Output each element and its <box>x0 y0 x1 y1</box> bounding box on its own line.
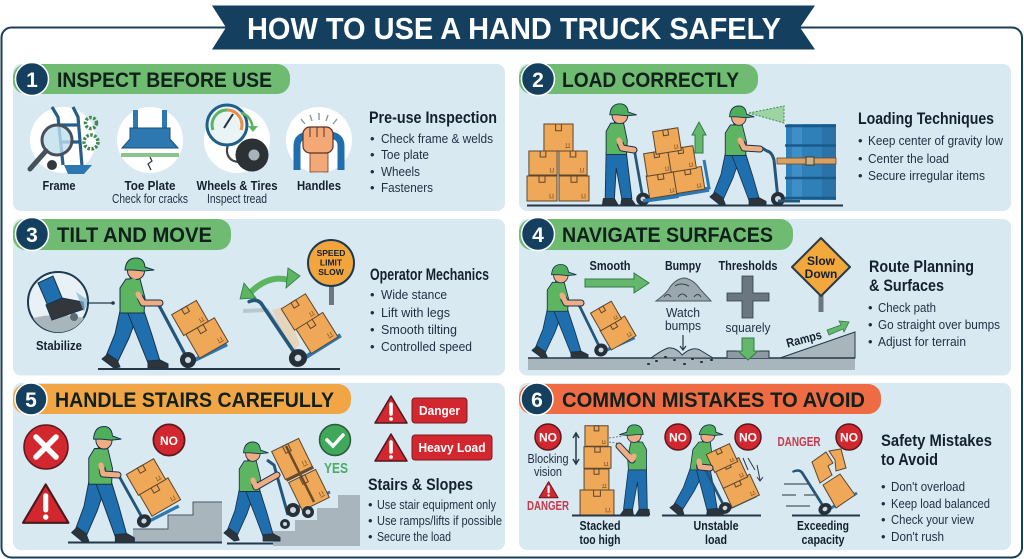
text: pre-use inspection: Toe plate <box>381 147 429 162</box>
text: loading techniques: Secure irregular items <box>868 168 985 183</box>
text: route planning: • <box>868 317 873 332</box>
labels: inspection items: Toe Plate <box>124 179 176 193</box>
warning: heavy load: Heavy Load <box>418 440 486 455</box>
panel: 4 navigate surfaces <box>519 218 1011 376</box>
labels: mistakes <box>580 519 849 547</box>
heading: tilt and move: TILT AND MOVE <box>57 223 212 247</box>
barrel <box>777 124 836 200</box>
ground line <box>572 514 649 516</box>
thresholds label and cross: squarely <box>726 321 771 335</box>
text: pre-use inspection: • <box>370 147 375 162</box>
text: route planning: & Surfaces <box>869 277 944 295</box>
text: operator mechanics: Operator Mechanics <box>370 266 489 284</box>
blocking vision note: Blocking <box>528 452 569 466</box>
sign: slow down: Slow <box>807 254 836 268</box>
text: stairs and slopes: • <box>368 529 373 544</box>
stairs right <box>227 495 360 546</box>
title banner: HOW TO USE A HAND TRUCK SAFELY <box>247 11 781 46</box>
text: operator mechanics: • <box>370 339 375 354</box>
text: safety mistakes: • <box>881 512 886 527</box>
heading: handle stairs carefully <box>13 383 351 415</box>
heading: navigate surfaces: NAVIGATE SURFACES <box>562 223 773 247</box>
heading: tilt and move <box>13 218 231 250</box>
warning: danger: Danger <box>419 403 460 418</box>
sign: speed limit slow <box>308 240 354 305</box>
text: operator mechanics: Smooth tilting <box>381 322 457 337</box>
worker with truck <box>532 264 636 359</box>
arrow: lift up <box>692 122 706 153</box>
text: stairs and slopes <box>368 476 502 544</box>
text: stairs and slopes: Stairs & Slopes <box>368 476 473 494</box>
heading: tilt and move: 3 <box>26 224 38 247</box>
text: loading techniques: • <box>858 168 863 183</box>
heading: load correctly: LOAD CORRECTLY <box>562 68 739 92</box>
worker pushing truck <box>102 258 229 372</box>
bumpy label and gravel: bumps <box>665 319 701 333</box>
labels: mistakes: too high <box>580 533 620 547</box>
badge: no: NO <box>160 434 178 448</box>
text: pre-use inspection: • <box>370 131 375 146</box>
heading: navigate surfaces: 4 <box>532 224 544 247</box>
badges: no no: NO <box>739 430 757 444</box>
text: route planning: • <box>868 300 873 315</box>
stairs left <box>68 502 222 542</box>
panel: 2 load correctly <box>519 62 1011 211</box>
bumpy label and gravel: Bumpy <box>665 259 701 273</box>
blocking vision note: DANGER <box>527 499 569 513</box>
bumps on ground <box>648 348 713 364</box>
labels: inspection items: Inspect tread <box>207 192 267 206</box>
badge: yes <box>320 424 350 477</box>
arrow: height <box>573 433 579 464</box>
ground strip <box>528 332 855 370</box>
bumpy label and gravel <box>656 259 711 350</box>
stacked boxes <box>580 426 614 515</box>
sign: speed limit slow: LIMIT <box>320 258 343 268</box>
labels: mistakes: capacity <box>802 533 845 547</box>
labels: mistakes: Exceeding <box>797 519 849 533</box>
ramps label and arrow <box>785 321 849 351</box>
text: pre-use inspection: Pre-use Inspection <box>369 109 497 127</box>
danger label and no badge: NO <box>840 430 858 444</box>
text: operator mechanics: • <box>370 305 375 320</box>
text: operator mechanics: Lift with legs <box>381 305 450 320</box>
overloaded truck with broken boxes <box>782 449 859 518</box>
text: stairs and slopes: Use stair equipment only <box>377 497 496 512</box>
worker with loaded truck <box>602 104 709 207</box>
heading: handle stairs carefully: HANDLE STAIRS CAREFULLY <box>55 388 334 412</box>
heading: inspect before use: 1 <box>26 69 38 92</box>
icon: wheels and tires <box>204 105 270 173</box>
sign: speed limit slow: SPEED <box>317 248 345 258</box>
text: operator mechanics: • <box>370 287 375 302</box>
text: operator mechanics: • <box>370 322 375 337</box>
ground line <box>662 514 761 516</box>
labels: inspection items: Frame <box>42 179 76 193</box>
text: operator mechanics: Controlled speed <box>381 339 472 354</box>
arrow: tilt motion <box>240 268 300 299</box>
badges: no no: NO <box>669 430 687 444</box>
text: loading techniques: • <box>858 133 863 148</box>
text: pre-use inspection: Check frame & welds <box>381 131 493 146</box>
text: safety mistakes: Don't overload <box>891 479 965 494</box>
heading: inspect before use <box>13 62 290 96</box>
labels: mistakes: load <box>705 533 727 547</box>
bumpy label and gravel: Watch <box>666 306 700 320</box>
text: pre-use inspection <box>369 109 497 195</box>
smooth label and arrow <box>585 259 649 293</box>
panel: 3 tilt and move <box>13 218 505 376</box>
worker on stairs (no) <box>72 426 181 542</box>
label: stabilize: Stabilize <box>36 339 82 353</box>
worker reading stack <box>609 425 650 515</box>
danger label and no badge: DANGER <box>778 435 820 449</box>
heading: load correctly: 2 <box>532 69 544 92</box>
text: safety mistakes <box>881 432 992 544</box>
text: pre-use inspection: Fasteners <box>381 180 433 195</box>
panel: 6 common mistakes to avoid <box>519 383 1011 550</box>
text: stairs and slopes: • <box>368 513 373 528</box>
blocking vision note: vision <box>534 465 562 479</box>
icon: warning triangle <box>23 484 68 523</box>
text: operator mechanics: Wide stance <box>381 287 447 302</box>
text: safety mistakes: Keep load balanced <box>891 496 990 511</box>
danger label and no badge <box>778 424 862 450</box>
text: safety mistakes: • <box>881 529 886 544</box>
text: safety mistakes: Safety Mistakes <box>881 432 992 450</box>
text: loading techniques: • <box>858 151 863 166</box>
text: loading techniques: Keep center of gravity low <box>868 133 1004 148</box>
labels: inspection items <box>42 179 341 206</box>
labels: inspection items: Wheels & Tires <box>196 179 278 193</box>
warning: heavy load <box>375 434 492 461</box>
labels: mistakes: Stacked <box>580 519 620 533</box>
badges: no no <box>665 424 761 450</box>
heading: handle stairs carefully: 5 <box>25 389 37 412</box>
text: safety mistakes: to Avoid <box>881 451 938 469</box>
ground line <box>98 368 340 370</box>
icon: handles <box>286 107 352 173</box>
labels: inspection items: Check for cracks <box>112 192 188 206</box>
thresholds label and cross <box>718 259 778 360</box>
ground line <box>792 514 860 516</box>
icon: toe plate <box>117 107 183 173</box>
heading: load correctly <box>519 62 758 96</box>
ramps label and arrow: Ramps <box>785 328 823 351</box>
text: stairs and slopes: Secure the load <box>377 529 451 544</box>
sign: slow down <box>792 238 850 312</box>
heading: common mistakes <box>519 383 881 415</box>
worker on stairs (yes) <box>224 438 330 541</box>
text: pre-use inspection: • <box>370 180 375 195</box>
text: safety mistakes: Don't rush <box>891 529 944 544</box>
icon: foot stabilizing <box>28 272 115 332</box>
smooth label and arrow: Smooth <box>590 259 630 273</box>
panel: 5 handle stairs carefully <box>13 383 505 550</box>
warning: danger <box>375 396 467 423</box>
text: stairs and slopes: Use ramps/lifts if possible <box>377 513 502 528</box>
blocking vision note <box>527 452 569 513</box>
text: pre-use inspection: Wheels <box>381 164 420 179</box>
badge: yes: YES <box>324 460 348 477</box>
icon: frame inspection <box>30 107 98 174</box>
heading: common mistakes: COMMON MISTAKES TO AVOID <box>562 388 865 412</box>
text: safety mistakes: • <box>881 496 886 511</box>
labels: inspection items: Handles <box>297 179 341 193</box>
badge: no: NO <box>539 430 557 444</box>
text: safety mistakes: • <box>881 479 886 494</box>
worker with unstable load <box>669 425 763 517</box>
vision cone <box>749 106 784 123</box>
sign: slow down: Down <box>805 267 837 281</box>
badge: no <box>153 424 185 456</box>
heading: common mistakes: 6 <box>531 389 543 412</box>
text: pre-use inspection: • <box>370 164 375 179</box>
text: route planning: Adjust for terrain <box>878 334 966 349</box>
text: safety mistakes: Check your view <box>891 512 975 527</box>
text: route planning: Go straight over bumps <box>878 317 1000 332</box>
tilted truck with ghost <box>243 270 344 372</box>
text: loading techniques: Center the load <box>868 151 949 166</box>
labels: mistakes: Unstable <box>694 519 739 533</box>
text: operator mechanics <box>370 266 489 354</box>
panel: 1 inspect before use <box>13 62 505 211</box>
text: stairs and slopes: • <box>368 497 373 512</box>
text: route planning <box>868 258 1000 349</box>
sign: speed limit slow: SLOW <box>318 267 345 277</box>
ground line <box>527 204 843 206</box>
icon: red x <box>24 425 68 469</box>
heading: inspect before use: INSPECT BEFORE USE <box>57 68 272 92</box>
text: loading techniques <box>858 110 1004 183</box>
heading: navigate surfaces <box>519 218 793 250</box>
badge: no <box>535 424 561 450</box>
text: route planning: Route Planning <box>869 258 974 276</box>
text: loading techniques: Loading Techniques <box>858 110 994 128</box>
box stack <box>527 124 589 201</box>
text: route planning: • <box>868 334 873 349</box>
worker with barrel <box>710 106 800 206</box>
text: route planning: Check path <box>878 300 936 315</box>
thresholds label and cross: Thresholds <box>718 259 778 273</box>
